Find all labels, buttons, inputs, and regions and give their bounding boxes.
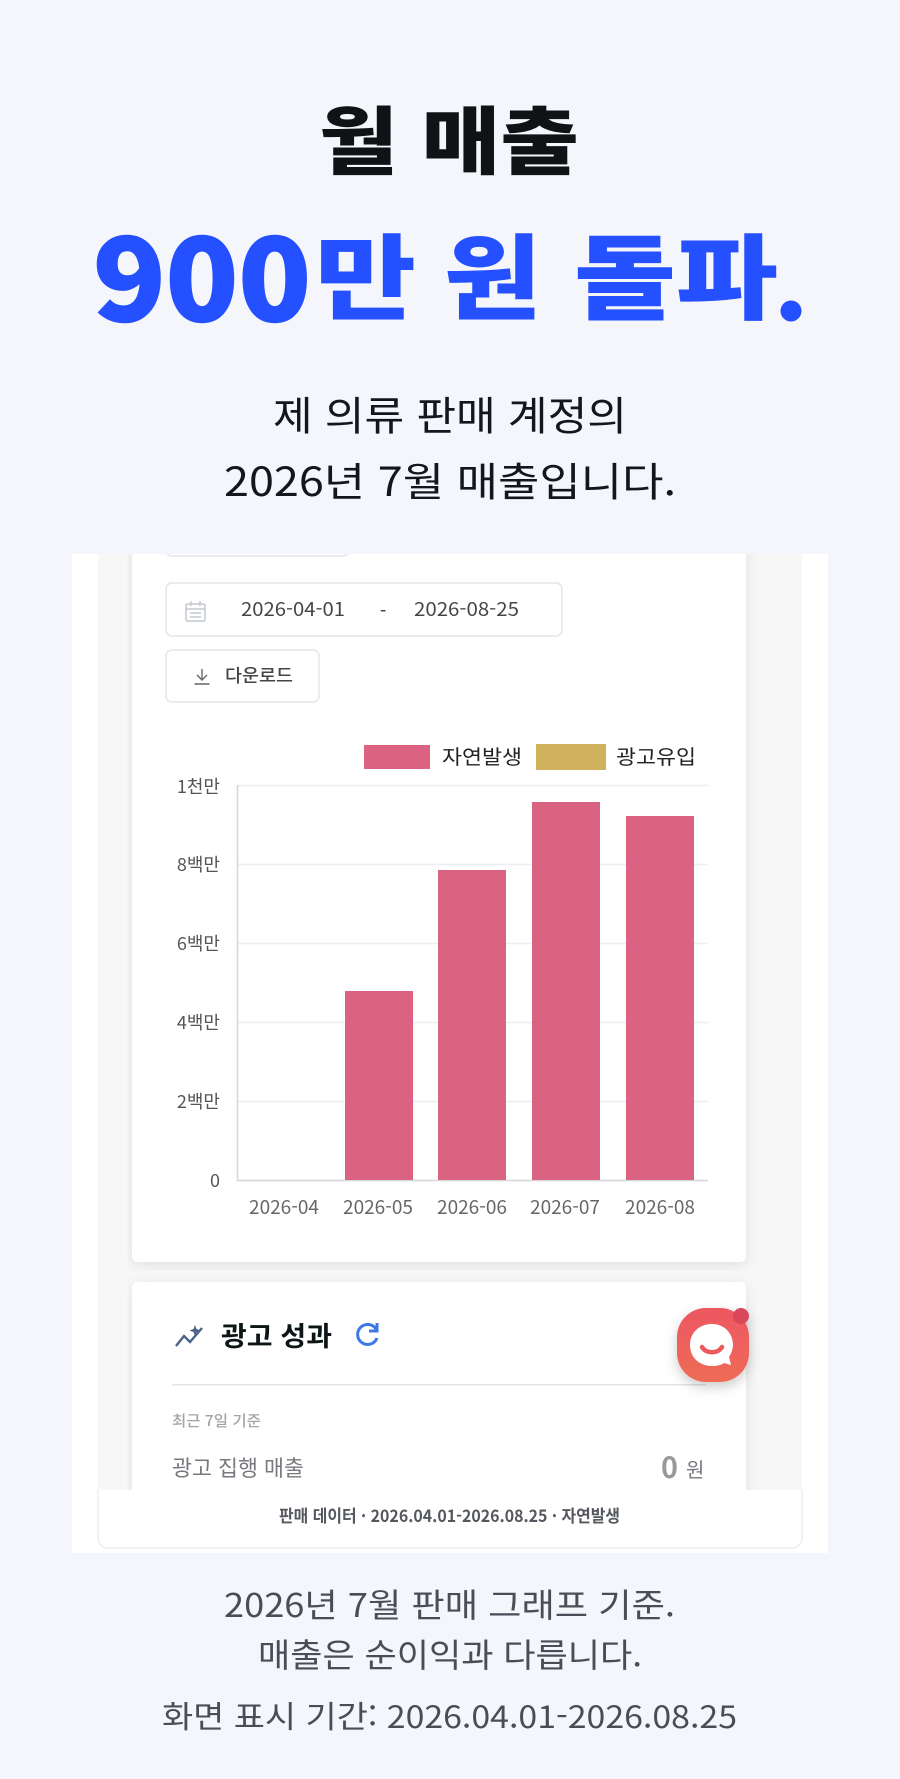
bottom note xyxy=(162,1579,737,1737)
x axis labels xyxy=(250,1200,694,1214)
chart legend xyxy=(364,744,694,770)
y axis labels: 0 xyxy=(210,1167,220,1193)
headline: 9 million won exceeded: 돌파 xyxy=(574,204,778,339)
card: sales chart xyxy=(132,530,746,1262)
intro text: 2026년 7월 매출입니다. xyxy=(224,450,676,508)
icon: sparkle chart xyxy=(176,1325,202,1346)
title: monthly sales: 월 매출 xyxy=(319,83,579,190)
bar chart xyxy=(177,773,708,1220)
icon: calendar xyxy=(186,601,205,621)
date range box: - xyxy=(380,600,386,621)
metric label: 광고 집행 매출 xyxy=(172,1451,304,1483)
metric value: 원 xyxy=(686,1454,704,1483)
caption: 최근 7일 기준 xyxy=(172,1410,261,1431)
x axis labels: 2026-05 xyxy=(343,1193,413,1220)
download button xyxy=(166,650,319,702)
chart legend: 자연발생 xyxy=(442,741,522,770)
date range box xyxy=(166,583,562,636)
panel: dashboard screenshot xyxy=(72,530,828,1553)
panel footer caption xyxy=(98,1490,802,1548)
headline: 9 million won exceeded xyxy=(93,190,802,354)
screenshot background area xyxy=(98,554,802,1490)
icon: refresh xyxy=(358,1323,377,1344)
y axis labels: 8백만 xyxy=(177,851,220,877)
card: ad performance xyxy=(130,1291,748,1490)
x axis labels: 2026-06 xyxy=(437,1193,507,1220)
y axis labels: 6백만 xyxy=(177,930,220,956)
y axis labels: 4백만 xyxy=(177,1009,220,1035)
metric value: 0 xyxy=(661,1445,678,1487)
x axis labels: 2026-08 xyxy=(625,1193,695,1220)
y axis labels xyxy=(177,773,220,1193)
chart legend: 광고유입 xyxy=(616,741,696,770)
headline: 9 million won exceeded: 만 xyxy=(315,204,416,339)
headline: 9 million won exceeded: 원 xyxy=(444,204,541,339)
bottom note: 2026년 7월 판매 그래프 기준. xyxy=(224,1579,675,1627)
divider xyxy=(172,1384,706,1386)
y axis labels: 2백만 xyxy=(177,1088,220,1114)
icon: chat button xyxy=(677,1308,749,1382)
download button: 다운로드 xyxy=(225,662,293,688)
icon: download xyxy=(194,669,210,684)
x axis labels: 2026-07 xyxy=(530,1193,600,1220)
headline: 9 million won exceeded: 900 xyxy=(93,190,311,354)
bottom note: 매출은 순이익과 다릅니다. xyxy=(258,1629,642,1677)
intro text xyxy=(224,384,676,508)
date range box: 2026-04-01 xyxy=(241,595,345,622)
x axis labels: 2026-04 xyxy=(249,1193,319,1220)
section heading: 광고 성과 xyxy=(221,1315,332,1354)
panel footer caption: 판매 데이터 · 2026.04.01-2026.08.25 · 자연발생 xyxy=(279,1502,620,1527)
cropped filter box xyxy=(166,554,348,557)
bottom note: 화면 표시 기간: 2026.04.01-2026.08.25 xyxy=(162,1692,737,1737)
intro text: 제 의류 판매 계정의 xyxy=(273,384,627,442)
date range box: 2026-08-25 xyxy=(414,595,519,622)
bars xyxy=(345,802,694,1180)
y axis labels: 1천만 xyxy=(177,773,220,799)
metric value xyxy=(662,1456,702,1478)
